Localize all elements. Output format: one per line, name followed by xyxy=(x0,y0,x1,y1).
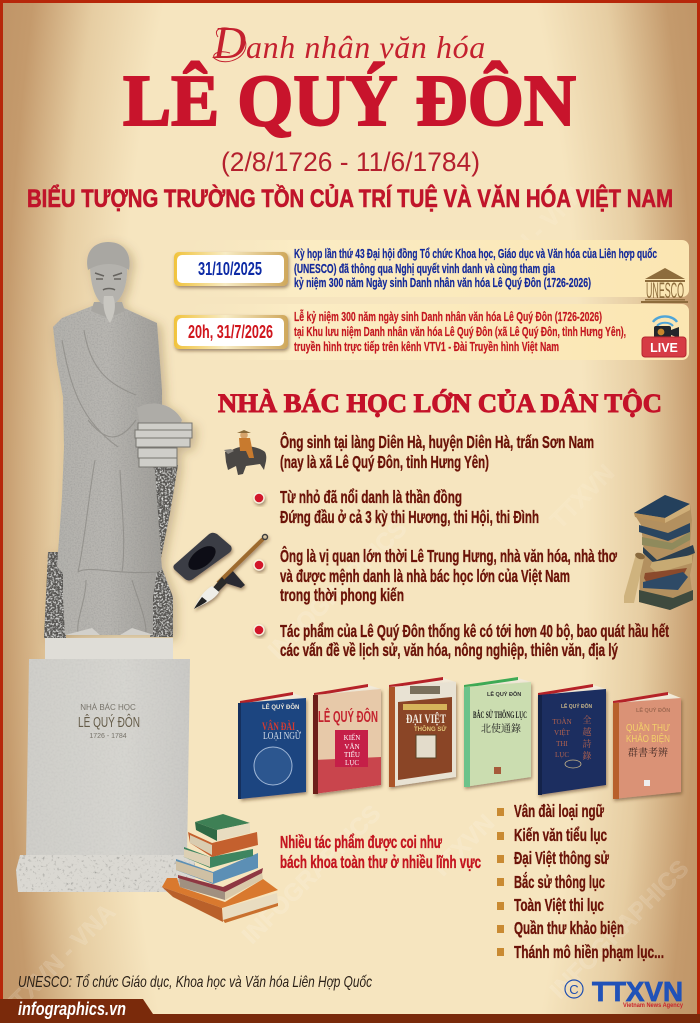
watermarks: TTXVN xyxy=(425,810,500,884)
book: Quần thư khảo biện: QUẦN THƯ xyxy=(626,721,670,734)
book: Toàn Việt thi lục: 越 xyxy=(582,725,592,738)
text block: great scholar xyxy=(280,545,617,605)
bullet 2 xyxy=(254,560,264,570)
panel 1 text xyxy=(294,246,657,290)
date pill 1: 31/10/2025 xyxy=(198,259,262,279)
list markers xyxy=(497,808,504,956)
robe and body xyxy=(53,306,162,635)
book: Toàn Việt thi lục xyxy=(538,684,606,795)
callout: encyclopedic works: Nhiều tác phẩm được coi như xyxy=(280,832,442,852)
pedestal xyxy=(16,638,195,892)
text block: child prodigy: Đứng đầu ở cả 3 kỳ thi Hương, thi Hội, thi Đình xyxy=(280,507,539,527)
book: Quần thư khảo biện: KHẢO BIỆN xyxy=(626,732,670,745)
icon: stack of old books xyxy=(624,495,695,610)
logo: TTXVN: C xyxy=(569,982,579,997)
date pill 1 xyxy=(174,252,288,286)
logo: TTXVN: TTXVN xyxy=(592,976,683,1007)
footer band and site tab xyxy=(0,999,700,1023)
logo: TTXVN: Vietnam News Agency xyxy=(623,1002,683,1009)
book: Kiến văn tiểu lục: VĂN xyxy=(344,743,360,751)
callout: encyclopedic works: bách khoa toàn thư ở nhiều lĩnh vực xyxy=(280,852,481,872)
text block: child prodigy xyxy=(280,487,539,527)
book: Toàn Việt thi lục: THI xyxy=(556,740,568,748)
feet xyxy=(65,628,154,635)
beard xyxy=(103,296,115,323)
title: Danh nhân văn hóa: D xyxy=(212,17,246,68)
book: Quần thư khảo biện xyxy=(613,692,681,799)
head xyxy=(90,264,127,304)
watermarks: TTXVN xyxy=(545,460,620,534)
panel 1 text: (UNESCO) đã thông qua Nghị quyết vinh danh và cùng tham gia xyxy=(294,261,556,276)
panel 2 text xyxy=(294,309,626,354)
book: Đại Việt thông sử xyxy=(389,677,456,787)
book: Quần thư khảo biện: LÊ QUÝ ĐÔN xyxy=(636,706,670,714)
book: Toàn Việt thi lục: TOÀN xyxy=(552,718,572,726)
list labels: Kiến văn tiểu lục xyxy=(514,825,607,845)
panel: 31/10/2025 xyxy=(174,240,689,303)
list labels: Bắc sử thông lục xyxy=(514,871,605,892)
rock behind statue xyxy=(44,465,178,638)
footer band and site tab: infographics.vn xyxy=(18,999,126,1019)
book: Bắc sứ thông lục: BẮC SỬ THÔNG LỤC xyxy=(473,710,527,720)
book: Đại Việt thông sử: ĐẠI VIỆT xyxy=(406,711,446,726)
book: Vân đài loại ngữ: VÂN ĐÀI xyxy=(262,719,295,733)
footnote: UNESCO: Tổ chức Giáo dục, Khoa học và Văn hóa Liên Hợp Quốc xyxy=(18,973,372,991)
book: Vân đài loại ngữ: LOẠI NGỮ xyxy=(263,730,301,742)
statue xyxy=(44,242,192,638)
text block: birthplace: (nay là xã Lê Quý Đôn, tỉnh Hưng Yên) xyxy=(280,452,489,472)
icon: live camera: LIVE xyxy=(650,341,678,355)
pedestal body xyxy=(26,659,190,859)
bullet 3 xyxy=(254,625,264,635)
title: Danh nhân văn hóa: anh nhân văn hóa xyxy=(246,29,486,65)
list labels xyxy=(514,801,664,962)
book: Vân đài loại ngữ xyxy=(238,692,306,799)
watermarks: INFOGRAPHICS xyxy=(263,515,412,664)
text block: works xyxy=(280,621,669,660)
book: Kiến văn tiểu lục: TIỂU xyxy=(344,751,360,759)
watermarks: INFOGRAPHICS xyxy=(237,800,386,949)
bullet 1 xyxy=(254,493,264,503)
panel 2 text: truyền hình trực tiếp trên kênh VTV1 - Đài Truyền hình Việt Nam xyxy=(294,339,559,354)
book: Bắc sứ thông lục xyxy=(464,677,531,787)
list labels: Vân đài loại ngữ xyxy=(514,801,604,821)
pedestal inscription xyxy=(78,703,140,740)
robe folds xyxy=(62,330,160,632)
book: Kiến văn tiểu lục: KIẾN xyxy=(344,734,360,742)
book: Bắc sứ thông lục: 北使通錄 xyxy=(481,720,521,735)
life dates: (2/8/1726 - 11/6/1784) xyxy=(221,147,480,177)
pedestal top plate xyxy=(45,638,173,659)
book: Toàn Việt thi lục: LÊ QUÝ ĐÔN xyxy=(561,702,593,710)
callout: encyclopedic works xyxy=(280,832,481,872)
cap xyxy=(87,242,130,270)
text block: child prodigy: Từ nhỏ đã nổi danh là thần đồng xyxy=(280,487,462,507)
book: Bắc sứ thông lục: LÊ QUÝ ĐÔN xyxy=(487,690,521,698)
watermarks: TTXVN - VNA xyxy=(465,179,591,304)
text block: birthplace xyxy=(280,431,594,472)
date pill 2 xyxy=(174,315,288,349)
book: Toàn Việt thi lục: 全 xyxy=(582,713,592,726)
pedestal inscription: 1726 - 1784 xyxy=(89,733,127,740)
icon: live camera xyxy=(642,316,686,357)
list of works xyxy=(497,801,664,962)
books under hand xyxy=(135,423,192,467)
watermarks: INFOGRAPHICS xyxy=(545,855,694,1004)
list labels: Quần thư khảo biện xyxy=(514,918,624,938)
face features xyxy=(95,273,122,290)
icon: boy on buffalo xyxy=(224,430,266,475)
book: Toàn Việt thi lục: 詩 xyxy=(582,737,592,750)
text block: great scholar: trong thời phong kiến xyxy=(280,585,404,605)
pedestal inscription: NHÀ BÁC HỌC xyxy=(80,703,136,712)
book: Đại Việt thông sử: THÔNG SỬ xyxy=(414,725,446,733)
icon: UNESCO temple xyxy=(641,268,688,303)
icon: colourful book pile xyxy=(162,814,278,923)
book: Kiến văn tiểu lục xyxy=(313,684,381,794)
book: Kiến văn tiểu lục: LÊ QUÝ ĐÔN xyxy=(318,707,378,726)
list labels: Đại Việt thông sử xyxy=(514,848,609,868)
book: Toàn Việt thi lục: 錄 xyxy=(582,749,592,762)
panel: 20h, 31/7/2026 xyxy=(174,304,689,360)
pedestal base xyxy=(16,855,195,892)
hand xyxy=(137,404,182,436)
date pill 2: 20h, 31/7/2026 xyxy=(188,322,273,342)
title: LÊ QUÝ ĐÔN: LÊ QUÝ ĐÔN xyxy=(123,60,576,141)
neck and collar xyxy=(91,302,125,318)
pedestal inscription: LÊ QUÝ ĐÔN xyxy=(78,714,140,731)
icon: ink stone and brush xyxy=(173,533,268,609)
title: Danh nhân văn hóa xyxy=(212,17,486,68)
book row xyxy=(238,677,681,799)
book: Kiến văn tiểu lục: LỤC xyxy=(345,759,359,767)
book: Toàn Việt thi lục: LỤC xyxy=(555,751,569,759)
book: Toàn Việt thi lục: VIỆT xyxy=(554,729,571,737)
book: Quần thư khảo biện: 群書考辨 xyxy=(628,744,668,759)
list labels: Toàn Việt thi lục xyxy=(514,895,604,915)
heading: Nhà bác học lớn của dân tộc: NHÀ BÁC HỌC LỚN CỦA DÂN TỘC xyxy=(218,389,662,418)
book: Vân đài loại ngữ: LÊ QUÝ ĐÔN xyxy=(262,703,299,711)
